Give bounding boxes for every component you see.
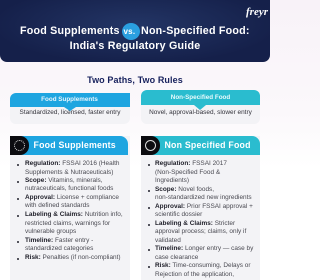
bullet list: Scope: Novel foods, — [155, 186, 214, 193]
header banner — [0, 0, 270, 62]
bullet list: Regulation: FSSAI 2017 — [155, 160, 227, 167]
title: Food Supplements — [20, 25, 120, 37]
bullet list: Risk: Penalties (if non-compliant) — [25, 254, 121, 261]
bullet list: vulnerable groups — [25, 228, 76, 235]
section heading: Two Paths, Two Rules — [87, 74, 183, 84]
card header — [141, 90, 260, 105]
bullet list: Labeling & Claims: Nutrition info, — [25, 211, 123, 218]
title: Non-Specified Food: — [141, 25, 250, 37]
bullet list: standardized categories — [25, 245, 93, 252]
panel: food supplements — [10, 136, 130, 280]
bullet list: Approval: Prior FSSAI approval + — [155, 203, 253, 210]
card: non-specified food summary — [141, 90, 260, 124]
icon: prohibited — [141, 136, 160, 155]
panel header: Food Supplements — [34, 140, 116, 150]
bullet list: Labeling & Claims: Stricter — [155, 220, 235, 227]
bullet list: non-standardized new ingredients — [155, 194, 252, 201]
bullet list: Approval: License + compliance — [25, 194, 119, 201]
title — [20, 25, 250, 52]
bullet list: Regulation: FSSAI 2016 (Health — [25, 160, 119, 167]
bullet list: Rejection of the application, — [155, 270, 234, 278]
bullet list: case clearance — [155, 254, 198, 260]
bullet list: nutraceuticals, functional foods — [25, 185, 113, 192]
bullet list: approval process; claims, only if — [155, 228, 246, 235]
card header — [10, 93, 130, 107]
card: food supplements summary — [10, 93, 130, 124]
title: vs. — [124, 27, 135, 36]
pointer — [64, 107, 76, 111]
bullet list: Scope: Vitamins, minerals, — [25, 177, 103, 184]
icon: supplements — [10, 136, 29, 155]
panel header — [141, 136, 260, 155]
bullet list: Ingredients) — [155, 177, 189, 184]
pointer — [194, 105, 206, 110]
bullet list — [148, 160, 254, 278]
card text: Standardized, licensed, faster entry — [20, 109, 120, 116]
bullet list: with defined standards — [25, 202, 89, 209]
bullet list: Risk: Time-consuming, Delays or — [155, 262, 251, 269]
card text: Novel, approval-based, slower entry — [149, 109, 252, 116]
vs badge — [122, 23, 140, 40]
bullet list: (Non-Specified Food & — [155, 169, 220, 176]
panel: non-specified food — [141, 136, 260, 280]
bullet list: Timeline: Faster entry - — [25, 237, 93, 244]
bullet list: restricted claims, warnings for — [25, 220, 110, 227]
bullet list: Supplements & Nutraceuticals) — [25, 169, 113, 176]
logo: freyr — [246, 6, 268, 18]
bullet list — [17, 160, 123, 261]
bullet list: scientific dossier — [155, 211, 202, 218]
card header: Non-Specified Food — [171, 94, 230, 101]
card header: Food Supplements — [41, 96, 98, 103]
panel header — [10, 136, 128, 155]
title: India's Regulatory Guide — [70, 40, 200, 52]
bullet list: Timeline: Longer entry — case by — [155, 245, 253, 252]
bullet list: validated — [155, 236, 181, 244]
panel header: Non Specified Food — [164, 140, 251, 150]
